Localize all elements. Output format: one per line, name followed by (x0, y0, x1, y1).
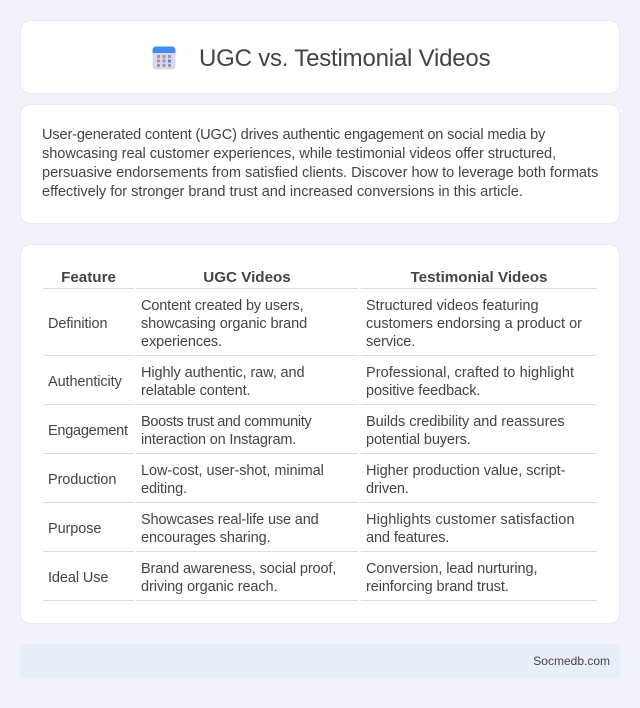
table header row: Testimonial Videos (410, 269, 548, 286)
row: Ideal Use: reinforcing brand trust. (366, 579, 509, 595)
row: Production: editing. (141, 481, 187, 497)
row: Definition: showcasing organic brand (141, 316, 307, 332)
row: Production: driven. (366, 481, 409, 497)
table header row (61, 269, 548, 286)
footer bar (20, 644, 620, 678)
row: Purpose: Showcases real-life use and (141, 512, 319, 528)
row: Engagement: Builds credibility and reassures (366, 414, 565, 430)
row: Definition: customers endorsing a product or (366, 316, 582, 332)
text: introduction paragraph: persuasive endorsements from satisfied clients. Discover how to leverage both formats (42, 165, 598, 181)
text: introduction paragraph: User-generated content (UGC) drives authentic engagement on social media by (42, 127, 545, 143)
text: introduction paragraph: showcasing real customer experiences, while testimonial videos offer structured, (42, 146, 556, 162)
row: Ideal Use: Brand awareness, social proof, (141, 561, 336, 577)
table header row: Feature (61, 269, 116, 286)
panel: title card (20, 20, 620, 94)
row: Purpose: and features. (366, 530, 449, 546)
row: Ideal Use: driving organic reach. (141, 579, 277, 595)
row: Authenticity: relatable content. (141, 383, 250, 399)
text: introduction paragraph: effectively for stronger brand trust and increased conversions in this article. (42, 184, 523, 200)
row: Engagement: potential buyers. (366, 432, 471, 448)
row: Definition: service. (366, 334, 415, 350)
row: Definition: Content created by users, (141, 298, 304, 314)
row: Purpose: Highlights customer satisfaction (366, 512, 575, 528)
row: Ideal Use: Ideal Use (48, 570, 108, 586)
row: Purpose (48, 512, 575, 546)
text: introduction paragraph (42, 127, 598, 200)
icon: calendar (152, 46, 176, 70)
row: Ideal Use (48, 561, 537, 595)
title: UGC vs. Testimonial Videos (199, 45, 490, 72)
panel: comparison table (20, 244, 620, 624)
row: Definition: experiences. (141, 334, 222, 350)
row: Purpose: encourages sharing. (141, 530, 270, 546)
row: Authenticity (48, 365, 574, 399)
row: Authenticity: Professional, crafted to highlight (366, 365, 574, 381)
row: Engagement: interaction on Instagram. (141, 432, 296, 448)
row: Ideal Use: Conversion, lead nurturing, (366, 561, 537, 577)
row: Purpose: Purpose (48, 521, 101, 537)
row: Definition (48, 298, 582, 350)
row: Authenticity: Authenticity (48, 374, 122, 390)
row: Definition: Structured videos featuring (366, 298, 538, 314)
row: Engagement: Boosts trust and community (141, 414, 311, 430)
panel: introduction (20, 104, 620, 224)
row: Authenticity: Highly authentic, raw, and (141, 365, 304, 381)
row: Authenticity: positive feedback. (366, 383, 480, 399)
row: Production: Low-cost, user-shot, minimal (141, 463, 324, 479)
row: Engagement (48, 414, 565, 448)
row: Definition: Definition (48, 316, 107, 332)
row: Production: Higher production value, script- (366, 463, 565, 479)
table header row: UGC Videos (203, 269, 291, 286)
footer text: Socmedb.com (533, 654, 610, 668)
row: Engagement: Engagement (48, 423, 128, 439)
row: Production: Production (48, 472, 116, 488)
row: Production (48, 463, 565, 497)
